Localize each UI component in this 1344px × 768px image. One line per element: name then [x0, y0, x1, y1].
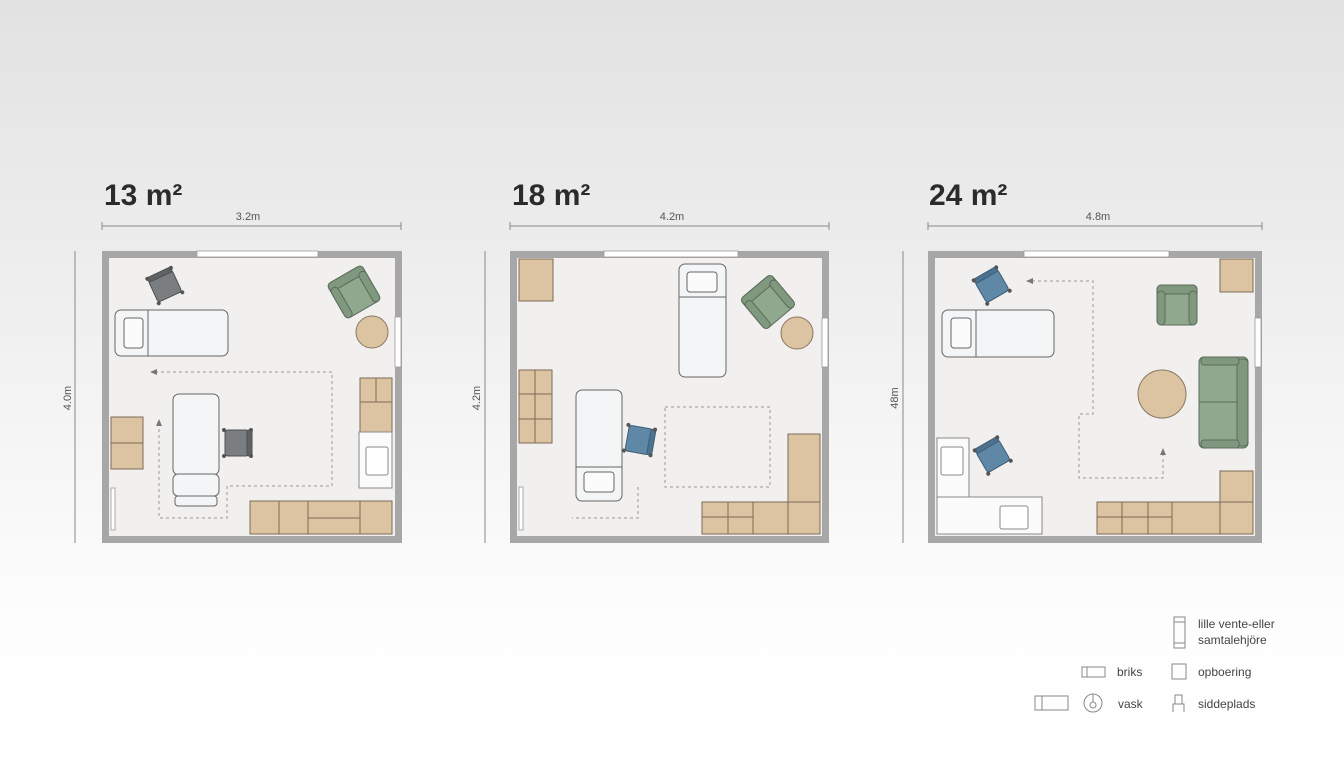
title: 13 m2: 13 m²: [104, 179, 182, 212]
walls: [928, 251, 1262, 543]
legend: siddeplads: siddeplads: [1198, 697, 1255, 711]
legend: vask: [1084, 694, 1144, 712]
sink: [359, 432, 392, 488]
furniture: bed: [115, 310, 228, 356]
legend: opboering: opboering: [1198, 665, 1251, 679]
furniture: side table: [356, 316, 388, 348]
room 1: 13 m2: [62, 179, 402, 543]
chair: [222, 428, 253, 458]
armchair: [740, 274, 796, 330]
storage top-right: [1220, 259, 1253, 292]
circulation path: [150, 369, 332, 518]
legend: waiting chair: lille vente-eller: [1198, 617, 1275, 631]
chair blue top: [971, 265, 1012, 306]
legend: siddeplads: [1173, 695, 1255, 712]
dimension: height 4.8m: 48m: [889, 387, 901, 409]
room 3: 24 m2: [889, 179, 1262, 543]
legend: vask: vask: [1118, 697, 1144, 711]
legend: bed: [1035, 696, 1068, 710]
storage top-left: [519, 259, 553, 301]
dimension: height 4.2m: 4.2m: [471, 386, 483, 410]
side table: [781, 317, 813, 349]
legend: briks: briks: [1117, 665, 1142, 679]
walls: [510, 251, 829, 543]
armchair: [1157, 285, 1197, 325]
title: 24 m2: 24 m²: [929, 179, 1007, 212]
dimension: width 3.2m: 3.2m: [236, 211, 260, 223]
chair blue: [622, 423, 657, 458]
path: [572, 407, 770, 518]
storage right/bottom: [702, 434, 820, 534]
path: [1026, 278, 1166, 478]
legend: briks: [1082, 665, 1142, 679]
title: 18 m2: 18 m²: [512, 179, 590, 212]
dimension: width 4.8m: 4.8m: [1086, 211, 1110, 223]
floor plan walls: [102, 251, 402, 543]
sofa: [1199, 357, 1248, 448]
furniture: chair top: [145, 265, 185, 306]
round table: [1138, 370, 1186, 418]
furniture: armchair: [327, 265, 381, 319]
room 2: 18 m2: [471, 179, 829, 543]
treatment bed: [576, 390, 622, 501]
storage: [1097, 471, 1253, 534]
dimension: height 4.0m: 4.0m: [62, 386, 74, 410]
legend: waiting chair: [1174, 617, 1275, 648]
dimension: width 4.2m: 4.2m: [660, 211, 684, 223]
bed: [679, 264, 726, 377]
bed: [942, 310, 1054, 357]
treatment bed: [173, 394, 219, 506]
storage bottom: [250, 501, 392, 534]
storage left: [519, 370, 552, 443]
storage left: [111, 417, 143, 469]
legend: waiting chair: samtalehjöre: [1198, 633, 1267, 647]
storage right: [360, 378, 392, 432]
chair blue: [972, 435, 1013, 476]
legend: opboering: [1172, 664, 1251, 679]
sink counter: [937, 438, 1042, 534]
legend: [1035, 617, 1275, 712]
